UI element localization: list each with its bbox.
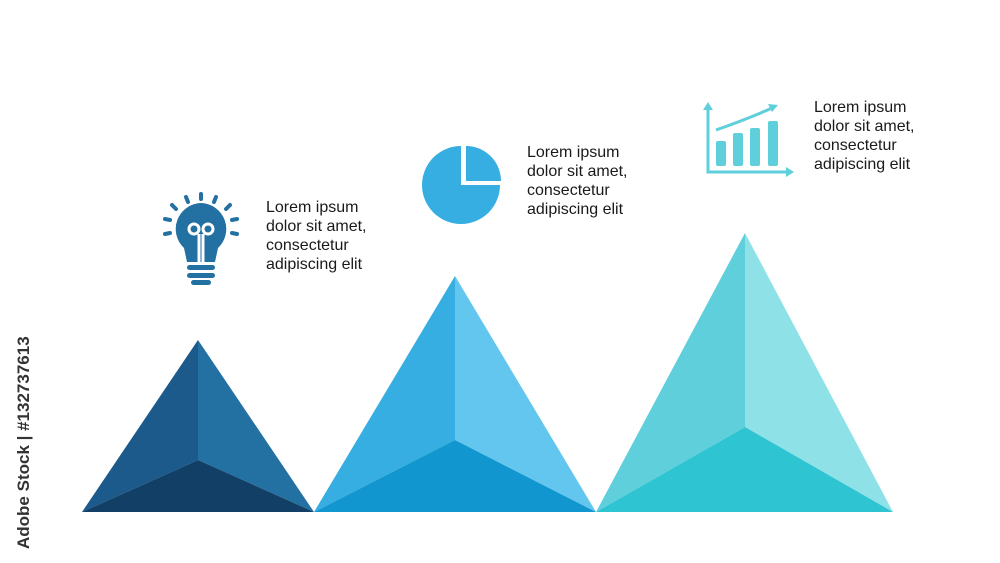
text block 3: Lorem ipsum [814,99,906,116]
icon: bar chart [703,102,794,177]
text block 1: consectetur [266,237,349,254]
text block 2: dolor sit amet, [527,163,627,180]
text block 2: consectetur [527,182,610,199]
watermark side text: Adobe Stock | #132737613 [14,336,33,549]
text block 2: adipiscing elit [527,201,623,218]
text block 2 [527,144,627,218]
text block 3: dolor sit amet, [814,118,914,135]
pyramid 3 [596,233,893,512]
pyramid 1 [82,340,314,512]
text block 1 [266,199,366,273]
text block 1: dolor sit amet, [266,218,366,235]
icon: light bulb [165,194,237,285]
pyramid 2 [314,276,596,512]
text block 2: Lorem ipsum [527,144,619,161]
text block 3: adipiscing elit [814,156,910,173]
text block 1: adipiscing elit [266,256,362,273]
text block 3 [814,99,914,173]
text block 3: consectetur [814,137,897,154]
icon: pie chart [422,146,501,224]
text block 1: Lorem ipsum [266,199,358,216]
